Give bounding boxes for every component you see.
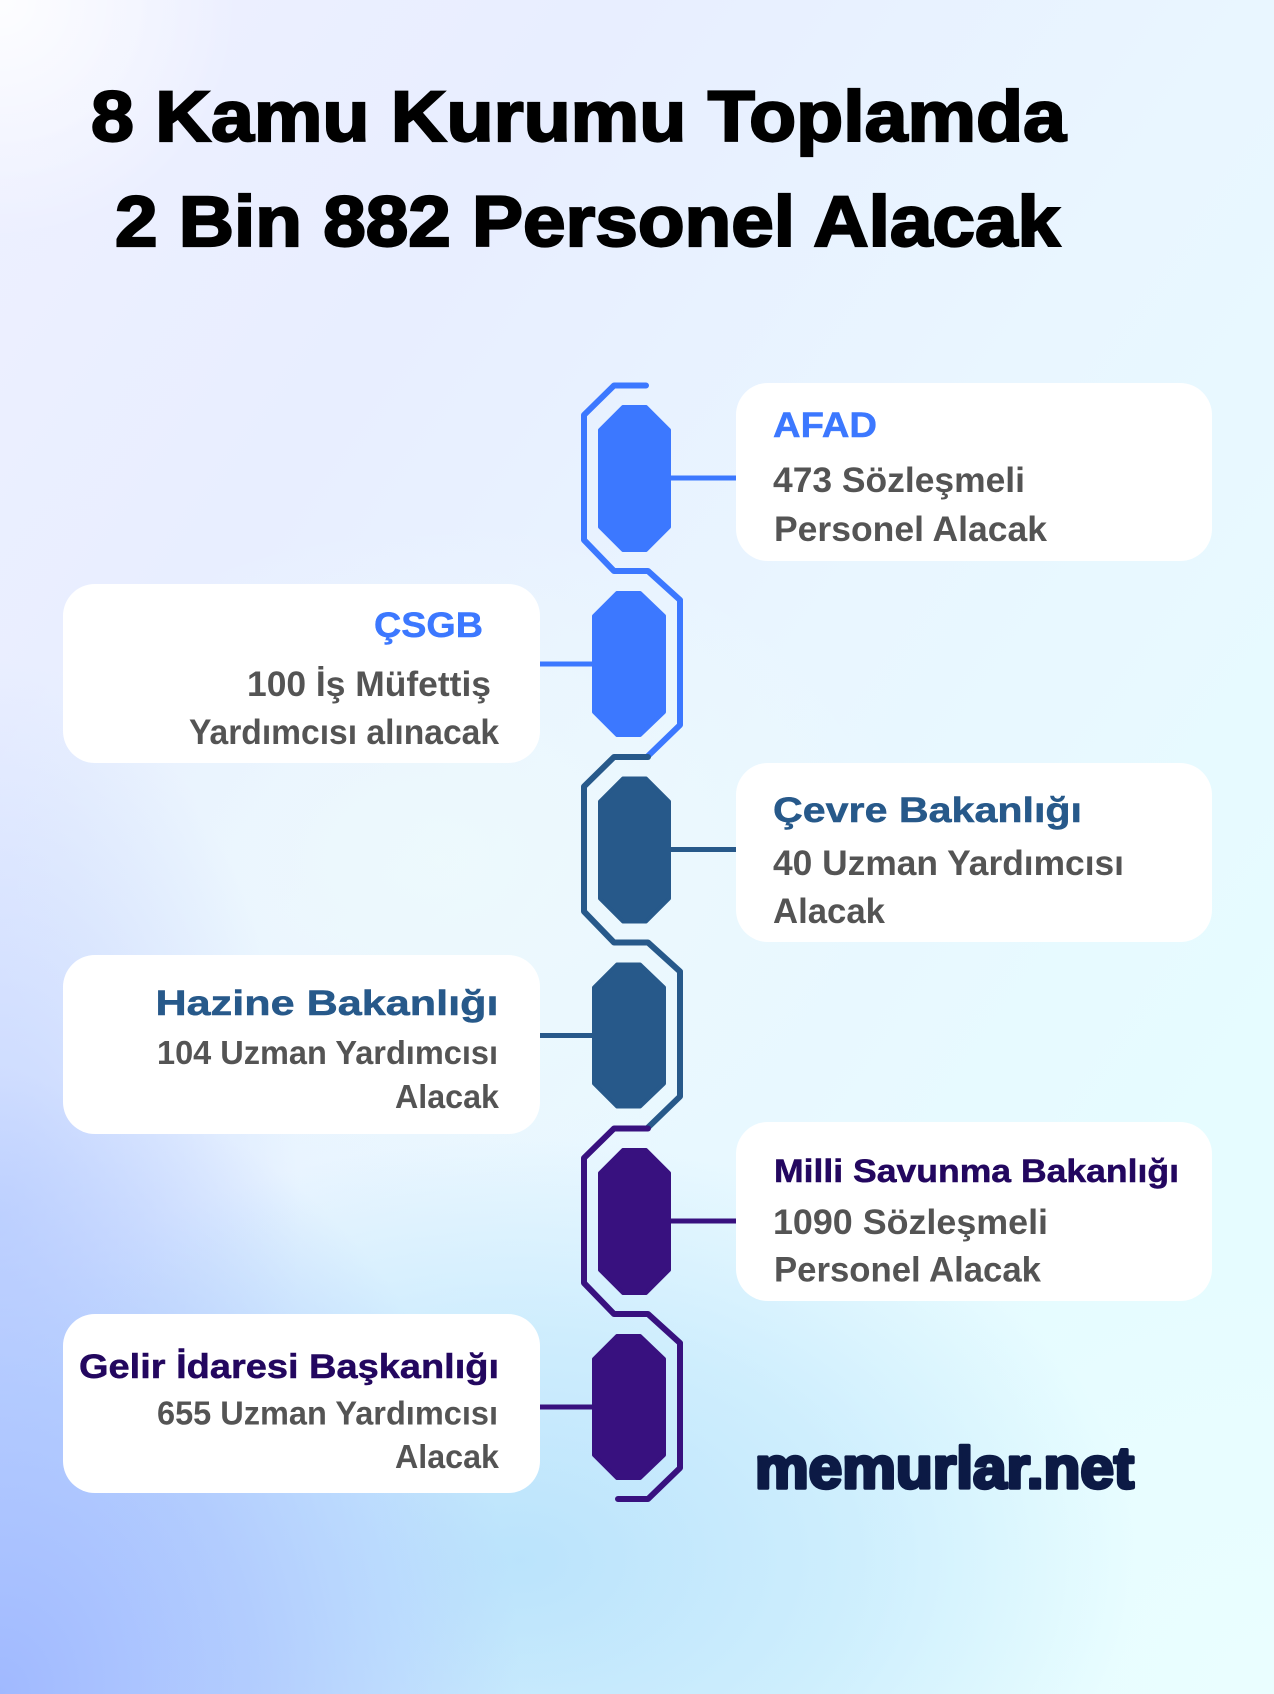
body line 1: 100 İş Müfettiş [247, 665, 491, 704]
connector line: ÇSGB [539, 662, 593, 666]
outline path [584, 386, 680, 756]
card [63, 955, 540, 1134]
outline path [584, 1128, 680, 1499]
heading: Milli Savunma Bakanlığı [774, 1153, 1179, 1189]
heading: Hazine Bakanlığı [156, 984, 498, 1023]
body line 1: 104 Uzman Yardımcısı [157, 1034, 498, 1071]
timeline: blue pair [539, 386, 737, 756]
panel: Hazine Bakanlığı [63, 955, 540, 1134]
body line 2: Yardımcısı alınacak [189, 713, 500, 752]
body line 2: Alacak [395, 1078, 500, 1115]
panel: ÇSGB [63, 584, 540, 763]
octagon: Çevre Bakanlığı [600, 778, 669, 922]
body line 2: Personel Alacak [774, 1250, 1042, 1290]
connector line: Gelir İdaresi Başkanlığı [539, 1404, 593, 1410]
heading: Çevre Bakanlığı [773, 791, 1082, 830]
timeline: purple pair [539, 1128, 737, 1499]
body line 1: 473 Sözleşmeli [773, 461, 1025, 500]
title [91, 78, 1067, 262]
connector line: Hazine Bakanlığı [539, 1033, 593, 1038]
connector line: AFAD [670, 476, 737, 480]
title: 8 Kamu Kurumu Toplamda [91, 78, 1067, 157]
logo: memurlar.net: memurlar.net [755, 1436, 1134, 1501]
octagon: Milli Savunma Bakanlığı [600, 1150, 669, 1293]
body line 2: Alacak [395, 1438, 500, 1475]
heading: AFAD [773, 406, 877, 445]
heading: Gelir İdaresi Başkanlığı [79, 1348, 499, 1386]
octagon: ÇSGB [594, 593, 664, 735]
connector line: Milli Savunma Bakanlığı [670, 1218, 737, 1224]
octagon: AFAD [600, 407, 669, 550]
body line 1: 655 Uzman Yardımcısı [157, 1394, 498, 1432]
outline path [584, 757, 680, 1128]
panel: Milli Savunma Bakanlığı [736, 1122, 1212, 1301]
card [63, 584, 540, 763]
card [63, 1314, 540, 1493]
body line 2: Personel Alacak [774, 510, 1048, 549]
heading: ÇSGB [374, 606, 483, 645]
body line 1: 40 Uzman Yardımcısı [773, 844, 1124, 883]
body line 2: Alacak [773, 892, 886, 931]
connector line: Çevre Bakanlığı [670, 847, 737, 852]
timeline: teal pair [539, 757, 737, 1128]
panel: Gelir İdaresi Başkanlığı [63, 1314, 540, 1493]
octagon: Gelir İdaresi Başkanlığı [594, 1336, 664, 1478]
card [736, 383, 1212, 561]
panel: AFAD [736, 383, 1212, 561]
card [736, 1122, 1212, 1301]
body line 1: 1090 Sözleşmeli [773, 1203, 1048, 1242]
card [736, 763, 1212, 942]
panel: Çevre Bakanlığı [736, 763, 1212, 942]
title: 2 Bin 882 Personel Alacak [115, 183, 1061, 262]
octagon: Hazine Bakanlığı [594, 964, 664, 1106]
